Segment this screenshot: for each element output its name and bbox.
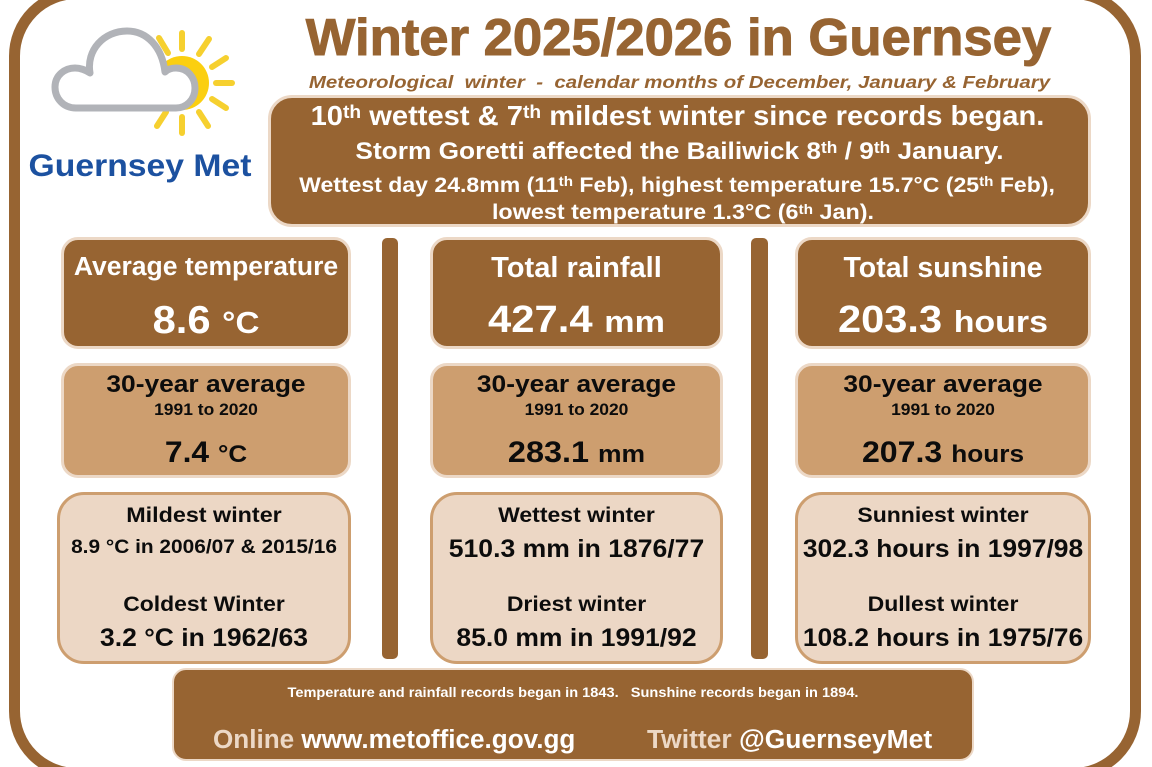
mildest value: 8.9 °C in 2006/07 & 2015/16 bbox=[71, 536, 337, 558]
panel: average temperature bbox=[61, 237, 351, 349]
summary line 3: Wettest day 24.8mm (11th Feb), highest temperature 15.7°C (25th Feb), bbox=[299, 173, 1055, 196]
panel: rainfall 30-year average bbox=[430, 363, 723, 478]
sunniest label: Sunniest winter bbox=[857, 503, 1029, 527]
panel: temperature 30-year average bbox=[61, 363, 351, 478]
logo wordmark: Guernsey Met bbox=[29, 147, 251, 183]
value: 283.1 mm bbox=[508, 436, 645, 469]
coldest label: Coldest Winter bbox=[123, 592, 285, 616]
heading: Total sunshine bbox=[844, 252, 1042, 284]
panel: footer bbox=[172, 668, 974, 761]
value: 207.3 hours bbox=[862, 436, 1024, 469]
icon: sun rays bbox=[157, 33, 232, 133]
value: 8.6 °C bbox=[153, 299, 259, 342]
subtitle: Meteorological winter - calendar months of December, January & February bbox=[309, 72, 1050, 92]
value: 427.4 mm bbox=[488, 299, 665, 341]
heading: Total rainfall bbox=[491, 252, 662, 284]
dullest label: Dullest winter bbox=[868, 592, 1018, 616]
period: 1991 to 2020 bbox=[525, 400, 628, 419]
icon: sun disc bbox=[155, 56, 209, 110]
heading: Average temperature bbox=[74, 253, 338, 281]
panel: temperature records bbox=[57, 492, 351, 664]
value: 7.4 °C bbox=[165, 436, 247, 469]
sunniest value: 302.3 hours in 1997/98 bbox=[803, 535, 1083, 563]
driest value: 85.0 mm in 1991/92 bbox=[456, 624, 697, 652]
divider bar 2 bbox=[751, 238, 768, 659]
value: 203.3 hours bbox=[838, 299, 1048, 341]
records note: Temperature and rainfall records began in 1843. Sunshine records began in 1894. bbox=[288, 685, 858, 700]
period: 1991 to 2020 bbox=[154, 400, 258, 419]
heading: 30-year average bbox=[843, 371, 1043, 398]
icon: cloud bbox=[55, 31, 195, 108]
website link: Online www.metoffice.gov.gg bbox=[213, 726, 575, 754]
panel: rainfall records bbox=[430, 492, 723, 664]
wettest value: 510.3 mm in 1876/77 bbox=[449, 535, 704, 563]
wettest label: Wettest winter bbox=[498, 503, 655, 527]
icon: Guernsey Met logo bbox=[52, 28, 235, 136]
summary line 1: 10th wettest & 7th mildest winter since records began. bbox=[311, 100, 1044, 131]
panel: total rainfall bbox=[430, 237, 723, 349]
divider bar 1 bbox=[382, 238, 398, 659]
panel: sunshine 30-year average bbox=[795, 363, 1091, 478]
driest label: Driest winter bbox=[507, 592, 646, 616]
panel: total sunshine bbox=[795, 237, 1091, 349]
twitter handle: Twitter @GuernseyMet bbox=[647, 726, 932, 754]
summary line 2: Storm Goretti affected the Bailiwick 8th / 9th January. bbox=[355, 138, 1004, 165]
coldest value: 3.2 °C in 1962/63 bbox=[100, 624, 308, 652]
summary line 4: lowest temperature 1.3°C (6th Jan). bbox=[492, 201, 874, 224]
dullest value: 108.2 hours in 1975/76 bbox=[803, 624, 1083, 652]
period: 1991 to 2020 bbox=[891, 400, 995, 419]
mildest label: Mildest winter bbox=[126, 503, 282, 527]
heading: 30-year average bbox=[106, 371, 306, 398]
panel: sunshine records bbox=[795, 492, 1091, 664]
title: Winter 2025/2026 in Guernsey bbox=[306, 9, 1051, 67]
panel: headline summary bbox=[268, 95, 1091, 227]
heading: 30-year average bbox=[477, 371, 676, 398]
